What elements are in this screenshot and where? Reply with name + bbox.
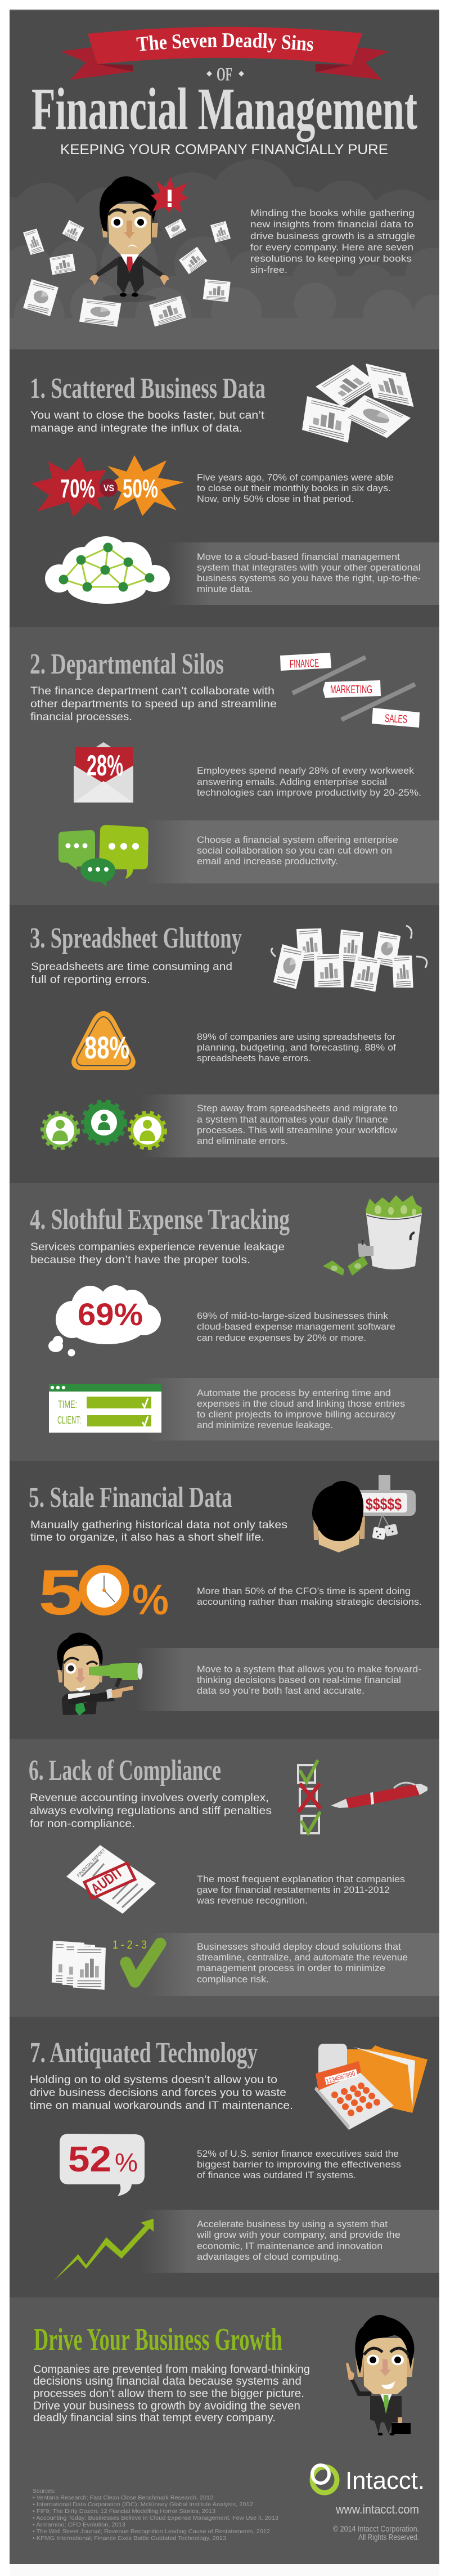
icon: email envelope 28%: 28% [87, 750, 123, 782]
text: solution: a system that automates your daily finance [197, 1115, 388, 1125]
sources: • Ventana Research; Fast Clean Close Benchmark Research, 2012 [33, 2494, 213, 2501]
stat: 50% with clock: 5 [38, 1557, 83, 1628]
intro text: Manually gathering historical data not only takes [30, 1519, 287, 1531]
panel: 1 Scattered Business Data [10, 349, 439, 627]
stat: 52% speech bubble: % [115, 2148, 138, 2177]
icon: email envelope 28% [74, 742, 133, 803]
icon: gambling head with slot display: $$$$$ [366, 1496, 402, 1514]
icon: calculator and folder: 1234567890 [325, 2070, 356, 2085]
text: solution: business systems so you have the right, up-to-the- [197, 573, 421, 584]
intro text: Holding on to old systems doesn’t allow you to [30, 2074, 277, 2086]
text: stat: technologies can improve productivity by 20-25%. [197, 788, 421, 798]
icon: department signs [280, 653, 420, 728]
text: stat [197, 2149, 401, 2180]
text: solution: Move to a cloud-based financial management [197, 552, 400, 562]
text: solution: advantages of cloud computing. [197, 2252, 341, 2262]
text: solution: Choose a financial system offering enterprise [197, 835, 398, 845]
footer strip [10, 2564, 439, 2576]
banner ribbon [61, 27, 389, 80]
cloud background [10, 236, 439, 349]
text: stat: 89% of companies are using spreadsheets for [197, 1032, 396, 1042]
text: solution: minute data. [197, 584, 253, 594]
heading: 6. Lack of Compliance [29, 1754, 221, 1787]
text: solution [197, 1103, 398, 1146]
text: solution: and eliminate errors. [197, 1136, 288, 1146]
icon: time and client form: CLIENT: [57, 1415, 81, 1426]
text: stat: More than 50% of the CFO’s time is spent doing [197, 1586, 411, 1596]
icon: leaking money bucket [323, 1195, 422, 1276]
stat: 70% vs 50%: VS [104, 483, 114, 493]
icon: warning triangle 88% [71, 1011, 136, 1070]
heading: 5. Stale Financial Data [29, 1482, 232, 1514]
text: solution: to client projects to improve billing accuracy [197, 1410, 396, 1420]
intro text: Minding the books while gathering [250, 208, 415, 218]
text: stat [197, 1311, 395, 1343]
panel: 7 Antiquated Technology [10, 2017, 439, 2297]
intro text: because they don’t have the proper tools. [30, 1254, 250, 1266]
text: solution: management process in order to minimize [197, 1963, 385, 1973]
text: stat [197, 1586, 422, 1607]
sources: • International Data Corporation (IDC); McKinsey Global Institute Analysis, 2012 [33, 2501, 253, 2508]
intro text: always evolving regulations and stiff penalties [30, 1805, 272, 1817]
text: stat: biggest barrier to improving the effectiveness [197, 2160, 401, 2170]
closing text [33, 2363, 310, 2424]
text: solution: email and increase productivity. [197, 856, 338, 867]
icon: thought cloud 69% [48, 1285, 161, 1356]
text: stat: spreadsheets have errors. [197, 1053, 311, 1063]
band [143, 1378, 439, 1440]
band [146, 1933, 439, 1996]
intro text: other departments to speed up and streamline [30, 698, 277, 710]
text: stat [197, 766, 421, 798]
text: stat: of finance was outdated IT systems. [197, 2170, 356, 2180]
icon: chat bubbles [58, 825, 148, 887]
panel: 4 Slothful Expense Tracking [10, 1183, 439, 1461]
text: stat: answering emails. Adding enterprise social [197, 777, 387, 787]
band [143, 820, 439, 883]
text: solution [197, 1388, 405, 1430]
text: stat: to close out their monthly books in six days. [197, 483, 391, 493]
icon: gambling head with slot display [312, 1475, 416, 1552]
intro text: sin-free. [250, 264, 287, 275]
intro text [31, 961, 232, 986]
intro text: time to organize, it also has a short shelf life. [30, 1532, 264, 1543]
text: solution [197, 1942, 408, 1985]
intro text: full of reporting errors. [31, 974, 150, 986]
text: solution: Accelerate business by using a system that [197, 2219, 388, 2229]
text: stat: gave for financial restatements in 2011-2012 [197, 1885, 390, 1895]
closing text: processes don’t allow them to see the bigger picture. [33, 2387, 304, 2400]
icon: audited financial report: FINANCIAL REPORT [76, 1847, 106, 1878]
heading: 1. Scattered Business Data [30, 373, 266, 405]
text: solution: and minimize revenue leakage. [197, 1420, 333, 1430]
band [135, 1648, 439, 1711]
stat: 70% vs 50% [31, 455, 184, 517]
icon: warning triangle 88%: 88% [84, 1030, 129, 1065]
intro text [30, 410, 265, 434]
text: solution: Automate the process by entering time and [197, 1388, 391, 1398]
icon: thought cloud 69%: 69% [78, 1296, 143, 1332]
icon: juggled spreadsheets [271, 926, 427, 992]
banner ribbon: The Seven Deadly Sins [136, 33, 313, 53]
panel: Drive Your Business Growth [10, 2297, 439, 2564]
closing text: Companies are prevented from making forward-thinking [33, 2363, 310, 2376]
band [141, 2210, 439, 2273]
stat: 52% speech bubble: 52 [68, 2139, 111, 2179]
stat: 52% speech bubble [60, 2134, 145, 2196]
text: solution: Move to a system that allows you to make forward- [197, 1664, 421, 1675]
intro text [30, 1792, 272, 1830]
panel: 6 Lack of Compliance [10, 1739, 439, 2017]
text: solution: Step away from spreadsheets and migrate to [197, 1103, 398, 1114]
heading: 4. Slothful Expense Tracking [30, 1204, 290, 1236]
text: solution: expenses in the cloud and linking those entries [197, 1399, 405, 1409]
panel: header [10, 10, 439, 349]
text: solution [197, 552, 421, 594]
icon: department signs: FINANCE [290, 657, 319, 671]
closing text: decisions using financial data because systems and [33, 2375, 302, 2387]
intro text: Spreadsheets are time consuming and [31, 961, 232, 973]
sources: • FIF9; The Dirty Dozen: 12 Fiancial Modelling Horror Stories, 2013 [33, 2508, 215, 2515]
text: stat: Now, only 50% close in that period. [197, 494, 354, 504]
closing text: deadly financial sins that tempt every company. [33, 2412, 276, 2424]
scattered report papers [22, 218, 231, 327]
band [166, 542, 439, 605]
icon: alert burst [151, 177, 188, 213]
stat: 50% with clock: % [132, 1576, 169, 1624]
sources: • The Wall Street Journal; Revenue Recognition Leading Cause of Restatements, 2012 [33, 2528, 270, 2535]
character: businessman with briefcase [346, 2315, 414, 2435]
intro text [250, 208, 415, 275]
text: solution: compliance risk. [197, 1974, 269, 1985]
heading: 3. Spreadsheet Gluttony [30, 922, 242, 954]
copyright: © 2014 Intacct Corporation. [333, 2524, 419, 2534]
text: solution: will grow with your company, and provide the [196, 2230, 400, 2240]
icon: checklist and pen [298, 1761, 428, 1833]
text: stat: planning, budgeting, and forecasting. 88% of [197, 1043, 396, 1053]
panel: 5 Stale Financial Data [10, 1461, 439, 1739]
character: businessman with telescope [57, 1632, 143, 1716]
icon: reports and 1-2-3 check: 1 - 2 - 3 [112, 1938, 147, 1951]
icon: department signs: SALES [384, 712, 408, 726]
text: solution: streamline, centralize, and automate the revenue [197, 1953, 408, 1963]
text: solution [197, 835, 398, 867]
band [141, 1094, 439, 1157]
intro text: financial processes. [30, 711, 132, 723]
icon: department signs: MARKETING [330, 684, 372, 696]
stat: 70% vs 50%: 50% [123, 474, 158, 503]
text: solution: data so you’re both fast and accurate. [197, 1686, 364, 1696]
intro text [30, 1519, 287, 1543]
website: www.intacct.com [335, 2502, 419, 2516]
text: solution: economic, IT maintenance and innovation [197, 2241, 382, 2251]
intro text [30, 685, 277, 723]
intro text: Revenue accounting involves overly complex, [30, 1792, 269, 1804]
icon: cloud network [45, 536, 170, 604]
text: solution: social collaboration so you can cut down on [197, 846, 392, 856]
title: of: OF [217, 64, 232, 85]
logo: Intacct: Intacct. [345, 2467, 425, 2494]
intro text: for every company. Here are seven [250, 242, 413, 253]
text: solution: system that integrates with your other operational [197, 563, 421, 573]
stat: 70% vs 50%: 70% [60, 474, 95, 503]
text: stat: Employees spend nearly 28% of every workweek [197, 766, 415, 776]
stat: 50% with clock [38, 1557, 169, 1628]
heading: Drive Your Business Growth [34, 2322, 282, 2357]
character: worried businessman [89, 176, 169, 302]
intro text: You want to close the books faster, but can’t [30, 410, 265, 421]
copyright: All Rights Reserved. [358, 2533, 419, 2542]
intro text: for non-compliance. [30, 1818, 135, 1830]
text: stat [197, 473, 394, 504]
text: solution [196, 2219, 400, 2262]
icon: stack of financial reports [302, 363, 415, 443]
text: solution: thinking decisions based on real-time financial [197, 1675, 401, 1685]
icon: time and client form [49, 1384, 161, 1433]
text: stat: was revenue recognition. [196, 1896, 308, 1906]
text: stat [197, 1032, 396, 1063]
intro text: new insights from financial data to [250, 219, 413, 230]
text: solution: Businesses should deploy cloud solutions that [197, 1942, 401, 1952]
intro text: drive business growth is a struggle [250, 231, 415, 241]
icon: audited financial report [66, 1845, 156, 1914]
intro text [30, 1241, 285, 1266]
text: stat: The most frequent explanation that companies [197, 1874, 405, 1884]
intro text: The finance department can’t collaborate with [30, 685, 274, 697]
sources: • KPMG International; Finance Exes Battle Outdated Technology, 2013 [33, 2535, 226, 2542]
icon: growth arrow [54, 2219, 154, 2281]
intro text: resolutions to keeping your books [250, 253, 412, 264]
icon: calculator and folder [314, 2044, 428, 2130]
copyright [333, 2524, 419, 2542]
text: stat: accounting rather than making strategic decisions. [197, 1597, 422, 1607]
icon: audited financial report: AUDIT [88, 1863, 126, 1897]
text: stat [196, 1874, 405, 1906]
subtitle: KEEPING YOUR COMPANY FINANCIALLY PURE [60, 142, 388, 158]
text: stat: cloud-based expense management software [197, 1322, 395, 1332]
text: stat: can reduce expenses by 20% or more. [197, 1333, 366, 1343]
sources: • Accounting Today; Businesses Believe in Cloud Expense Management, Few Use it, 2013 [33, 2515, 278, 2521]
text: solution [197, 1664, 421, 1696]
sources: Sources: [33, 2488, 56, 2494]
closing text: Drive your business to growth by avoiding the seven [33, 2400, 300, 2412]
text: stat: 69% of mid-to-large-sized businesses think [197, 1311, 389, 1321]
logo: Intacct [312, 2465, 425, 2494]
text: stat: Five years ago, 70% of companies were able [197, 473, 394, 483]
intro text: manage and integrate the influx of data. [30, 423, 242, 434]
text: stat: 52% of U.S. senior finance executives said the [197, 2149, 399, 2159]
text: solution: processes. This will streamline your workflow [197, 1125, 397, 1136]
intro text [30, 2074, 293, 2112]
sources [33, 2488, 278, 2542]
heading: 7. Antiquated Technology [30, 2037, 258, 2069]
heading: 2. Departmental Silos [30, 648, 224, 680]
intro text: time on manual workarounds and IT maintenance. [30, 2100, 293, 2112]
intro text: drive business decisions and forces you to waste [30, 2087, 286, 2099]
sources: • Armamino; CFO Evolution, 2013 [33, 2521, 125, 2528]
icon: time and client form: TIME: [58, 1399, 77, 1410]
panel: 2 Departmental Silos [10, 627, 439, 905]
icon: reports and 1-2-3 check [52, 1938, 160, 1990]
panel: 3 Spreadsheet Gluttony [10, 905, 439, 1183]
intro text: Services companies experience revenue leakage [30, 1241, 285, 1253]
icon: gears with people [42, 1101, 165, 1148]
